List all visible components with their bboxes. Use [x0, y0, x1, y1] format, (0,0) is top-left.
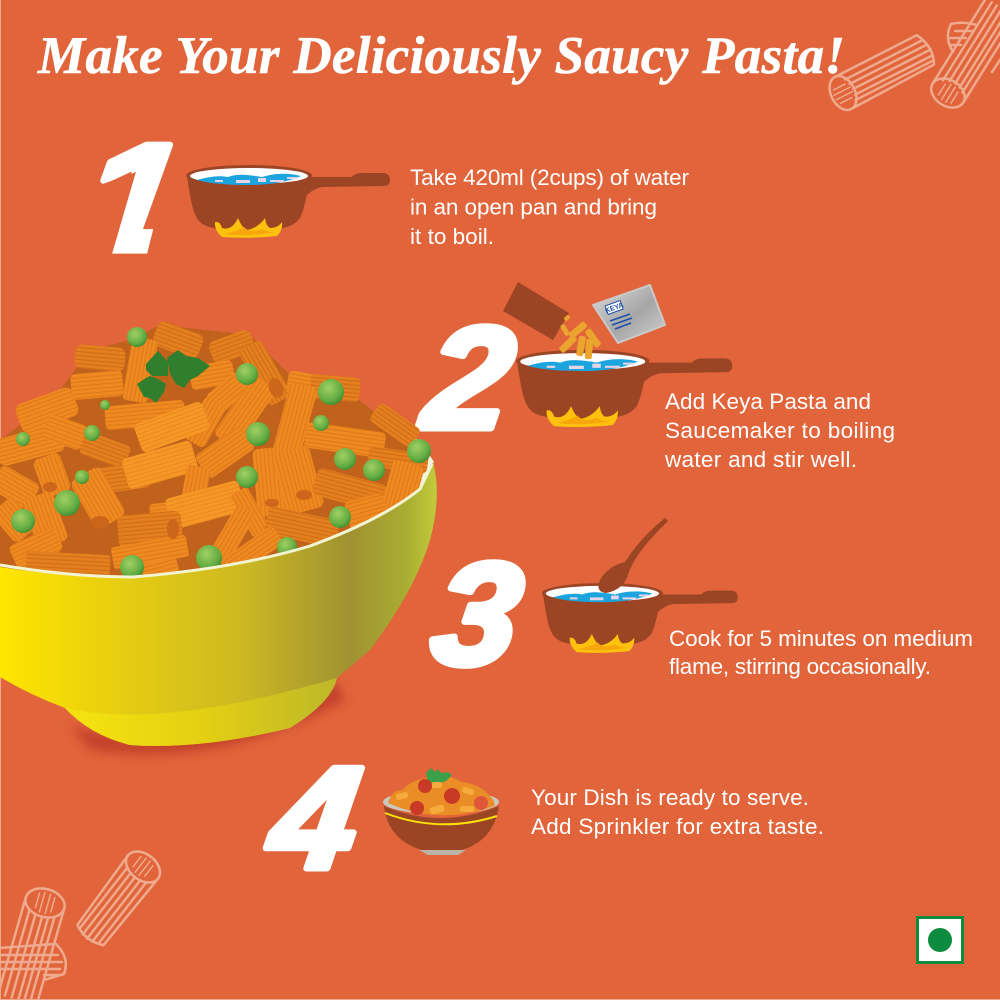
step 1 instructions: it to boil.: [410, 224, 494, 249]
peas: [11, 327, 431, 579]
step 2 pan icon: [516, 350, 732, 427]
pasta heap: [0, 320, 431, 580]
step 2 instructions: Saucemaker to boiling: [665, 418, 895, 443]
pasta hole details: [43, 376, 312, 539]
step 1 instructions: Take 420ml (2cups) of water: [410, 165, 690, 190]
bowl inner rim: [385, 418, 434, 490]
step 3 instructions: flame, stirring occasionally.: [669, 654, 931, 679]
step 2 instructions: [664, 389, 895, 472]
bowl shadow: [70, 680, 345, 754]
step 2 instructions: Add Keya Pasta and: [665, 389, 871, 414]
pasta bowl photo: [0, 320, 437, 754]
yellow bowl: [0, 462, 437, 746]
step 4 instructions: Your Dish is ready to serve.: [531, 785, 809, 810]
step 2 pasta box icon: [503, 282, 569, 340]
step 2 number: 2: [413, 297, 523, 459]
step 2 saucemaker sachet: [593, 285, 665, 343]
decoration: pasta outlines top right: [824, 0, 1000, 114]
step 4 bowl icon: [383, 768, 499, 855]
step 4 instructions: Add Sprinkler for extra taste.: [531, 814, 824, 839]
step 1 pan icon: [186, 165, 390, 238]
step 4 instructions: [531, 785, 824, 839]
step 3 pan icon: [542, 583, 738, 653]
step 4 number: 4: [259, 737, 369, 899]
step 2 instructions: water and stir well.: [664, 447, 857, 472]
step 3 instructions: Cook for 5 minutes on medium: [669, 626, 973, 651]
step 3 spoon icon: [598, 518, 668, 593]
step 1 number: 1: [71, 113, 190, 283]
step 1 instructions: in an open pan and bring: [410, 194, 657, 220]
step 2 saucemaker sachet: KEYA: [604, 302, 625, 315]
title: Make Your Deliciously Saucy Pasta!: [37, 27, 845, 85]
parsley leaf: [137, 350, 210, 403]
step 1 instructions: [410, 165, 690, 249]
step 3 number: 3: [424, 533, 531, 695]
vegetarian mark: [918, 918, 962, 962]
decoration: pasta outlines bottom left: [0, 845, 166, 1000]
step 3 instructions: [669, 626, 973, 679]
step 2 falling pasta: [558, 315, 602, 359]
